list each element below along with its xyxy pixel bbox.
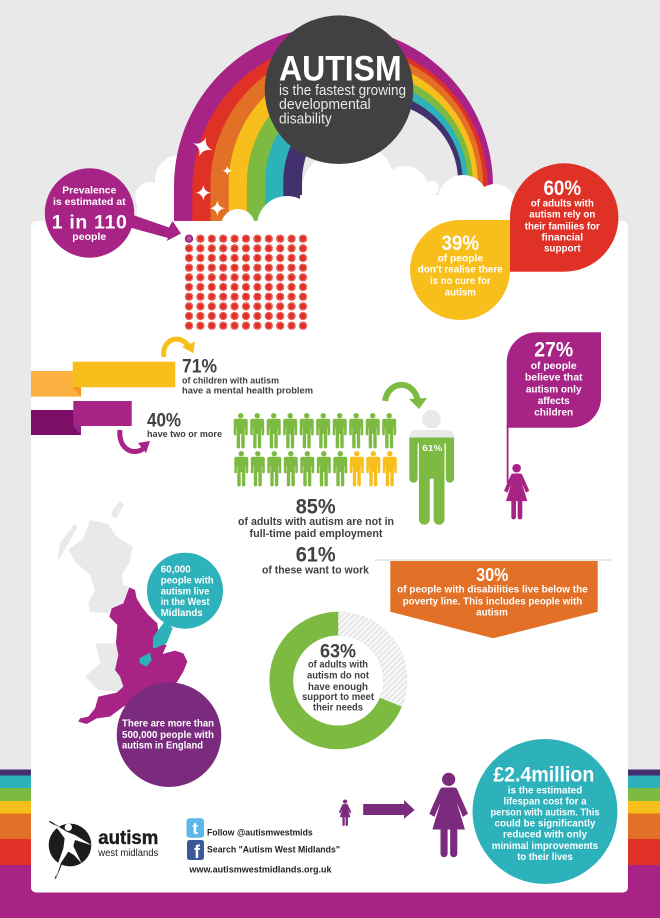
callout: 500,000 in England <box>117 682 221 787</box>
callout: 60 percent financial support: their families for <box>525 220 600 232</box>
callout: 60 percent financial support: support <box>544 243 581 255</box>
callout: 39 percent no cure: 39% <box>441 232 479 255</box>
donut chart: 63 percent: autism do not <box>307 670 369 682</box>
callout: 27 percent flag: of people <box>531 360 577 372</box>
arrow: small to large <box>363 800 415 819</box>
callout: 60,000 West Midlands: autism live <box>161 585 210 597</box>
callout: 39 percent no cure: autism <box>445 286 476 298</box>
main white panel <box>31 221 628 892</box>
callout: prevalence 1 in 110: Prevalence <box>62 184 116 196</box>
text: 40 percent two or more: have two or more <box>147 429 222 440</box>
title circle: developmental <box>279 96 371 113</box>
icon: facebook: f <box>194 842 201 862</box>
donut chart: 63 percent <box>281 612 407 737</box>
icon: large woman <box>429 773 468 857</box>
callout: prevalence 1 in 110: is estimated at <box>53 196 126 208</box>
donut chart: 63 percent: have enough <box>308 681 368 693</box>
ribbon: purple 40 percent <box>31 401 132 435</box>
arrow: purple curved <box>120 430 150 453</box>
logo: Autism West Midlands: autism <box>98 828 158 849</box>
callout: 60 percent financial support: 60% <box>543 177 581 200</box>
arrow: yellow curved <box>164 339 195 357</box>
text: employment statistics: of adults with autism are not in <box>238 516 394 528</box>
icon: small woman <box>339 799 351 826</box>
map: UK with England highlighted <box>57 502 187 724</box>
callout: 27 percent flag: children <box>534 407 573 419</box>
callout: lifespan cost: minimal improvements <box>492 840 598 852</box>
callout: 27 percent flag: 27% <box>534 339 574 362</box>
large person 61 percent: 61% <box>422 444 442 453</box>
callout: lifespan cost: lifespan cost for a <box>504 795 587 807</box>
rainbow <box>174 27 493 225</box>
donut chart: 63 percent: 63% <box>320 641 356 662</box>
text: social links: www.autismwestmidlands.org.uk <box>188 865 332 876</box>
text: 71 percent mental health: 71% <box>182 357 217 378</box>
callout: 60,000 West Midlands: 60,000 <box>161 564 191 576</box>
text: 40 percent two or more <box>147 411 222 440</box>
callout: 39 percent no cure: is no cure for <box>430 275 491 287</box>
callout: 60 percent financial support: financial <box>541 232 583 244</box>
text: 71 percent mental health: of children with autism <box>182 376 279 386</box>
callout: lifespan cost: reduced with only <box>503 829 587 841</box>
donut chart: 63 percent: of adults with <box>308 658 368 670</box>
callout: 500,000 in England: autism in England <box>122 739 203 751</box>
banner: 30 percent poverty: 30% <box>476 565 508 585</box>
text: employment statistics: 61% <box>296 544 336 567</box>
banner: 30 percent poverty <box>375 559 612 638</box>
callout: 60 percent financial support: of adults with <box>531 198 594 210</box>
callout: 27 percent flag: affects <box>538 395 570 407</box>
callout: 39 percent no cure: of people <box>437 253 483 265</box>
callout: prevalence 1 in 110: people <box>72 231 106 243</box>
callout: 60 percent financial support: autism rely on <box>529 209 595 221</box>
icon: twitter <box>186 818 204 838</box>
callout: lifespan cost: is the estimated <box>508 784 582 796</box>
icon: twitter: t <box>192 819 198 838</box>
callout: lifespan cost: to their lives <box>517 851 573 863</box>
donut chart: 63 percent: their needs <box>313 702 363 714</box>
text: employment statistics: of these want to work <box>262 564 370 576</box>
icon: woman holding flag <box>504 464 529 519</box>
donut chart: 63 percent: support to meet <box>302 691 374 703</box>
callout: 27 percent flag <box>507 332 601 483</box>
text: employment statistics: 85% <box>296 495 336 518</box>
callout: 60 percent financial support <box>510 163 618 272</box>
callout: 60,000 West Midlands: Midlands <box>161 607 203 619</box>
dot grid: 1 in 110 <box>185 235 307 330</box>
bottom rainbow stripes <box>0 770 660 918</box>
callout: 27 percent flag: autism only <box>526 383 582 395</box>
text: social links: Search "Autism West Midlands" <box>207 845 340 856</box>
callout: 60,000 West Midlands: people with <box>161 575 214 587</box>
callout: 500,000 in England: There are more than <box>122 718 214 730</box>
text: 71 percent mental health <box>182 357 313 396</box>
callout: 27 percent flag: believe that <box>525 372 583 384</box>
clouds in front of rainbow <box>221 148 525 256</box>
callout: 39 percent no cure <box>410 220 510 320</box>
logo: Autism West Midlands: west midlands <box>97 848 158 859</box>
callout: 60,000 West Midlands <box>147 553 223 648</box>
callout: prevalence 1 in 110 <box>45 168 134 258</box>
large person 61 percent <box>409 410 454 525</box>
title circle <box>265 15 413 164</box>
icon: facebook <box>187 840 204 862</box>
banner: 30 percent poverty: of people with disabilities live below the <box>397 584 588 596</box>
arrow: prevalence to dots <box>132 215 181 241</box>
ribbon: yellow 71 percent <box>31 362 175 397</box>
callout: lifespan cost <box>472 739 618 884</box>
clouds behind rainbow <box>135 155 205 224</box>
text: social links <box>188 828 340 876</box>
banner: 30 percent poverty: autism <box>476 606 508 618</box>
text: employment statistics: full-time paid employment <box>250 528 383 540</box>
text: 71 percent mental health: have a mental health problem <box>182 386 313 396</box>
arrow: green curved <box>385 385 427 409</box>
text: 40 percent two or more: 40% <box>147 411 181 432</box>
callout: 39 percent no cure: don't realise there <box>418 264 503 276</box>
title circle: is the fastest growing <box>279 82 406 99</box>
text: employment statistics <box>238 495 394 576</box>
callout: lifespan cost: person with autism. This <box>490 806 600 818</box>
callout: prevalence 1 in 110: 1 in 110 <box>52 211 127 233</box>
icon: sparkles <box>189 133 232 216</box>
text: social links: Follow @autismwestmids <box>207 828 313 839</box>
callout: 60,000 West Midlands: in the West <box>161 596 210 608</box>
title circle: disability <box>279 110 332 127</box>
banner: 30 percent poverty: poverty line. This includes people with <box>403 595 582 607</box>
callout: lifespan cost: could be significantly <box>494 818 596 830</box>
pictogram: ten by two people <box>234 413 397 486</box>
title circle: AUTISM <box>279 50 402 89</box>
callout: 500,000 in England: 500,000 people with <box>122 729 214 741</box>
callout: lifespan cost: £2.4million <box>493 764 594 787</box>
logo: Autism West Midlands <box>49 821 158 879</box>
